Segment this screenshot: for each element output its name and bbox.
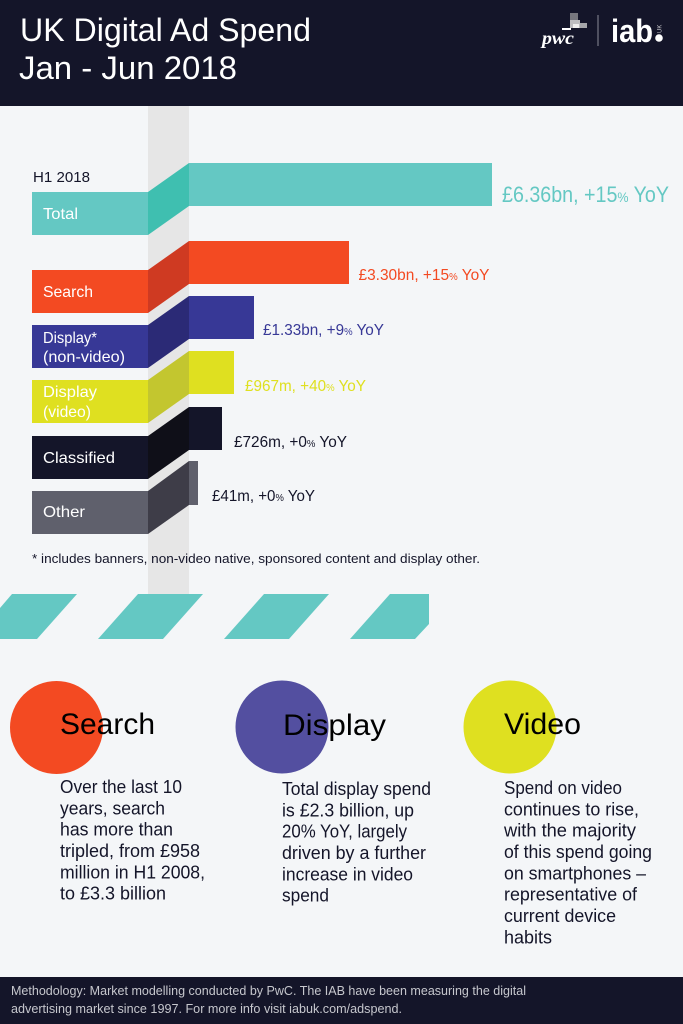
text: search: tripled, from £958	[60, 841, 200, 861]
footer: methodology: advertising market since 1997. For more info visit iabuk.com/adspend.	[11, 1001, 402, 1016]
bar: Classified: Classified	[43, 450, 115, 467]
panel: search	[10, 681, 205, 904]
H1 2018 label: H1 2018	[33, 169, 90, 186]
text: video: on smartphones –	[504, 863, 646, 883]
heading: search: Search	[60, 708, 155, 741]
text: video: Spend on video	[504, 778, 622, 798]
text: video: continues to rise,	[504, 799, 639, 819]
heading: video: Video	[504, 708, 581, 741]
logo: iab UK: UK	[658, 25, 664, 33]
logo: iab UK: iab	[611, 13, 653, 49]
header band	[0, 0, 683, 106]
bar: Other: Other	[43, 504, 86, 521]
circle: video	[464, 680, 556, 774]
bar: Other: £41m, +0% YoY	[212, 488, 315, 505]
bar: Display non-video: (non-video)	[43, 349, 125, 366]
title	[19, 12, 311, 86]
text: search: years, search	[60, 798, 165, 818]
text: search: million in H1 2008,	[60, 862, 205, 882]
teal stripe band	[0, 594, 429, 639]
text: video	[503, 778, 652, 947]
bar: Classified: £726m, +0% YoY	[234, 434, 347, 451]
logo: pwc	[540, 13, 587, 48]
footnote: * includes banners, non-video native, sponsored content and display other.	[32, 551, 480, 566]
bar: Search: £3.30bn, +15% YoY	[358, 267, 490, 284]
bar: Total: £6.36bn, +15% YoY	[502, 182, 669, 207]
text: search: has more than	[60, 820, 173, 840]
text: video: with the majority	[503, 821, 636, 841]
logo: pwc: pwc	[540, 28, 574, 48]
bar: Search	[32, 241, 490, 313]
text: display: 20% YoY, largely	[282, 822, 407, 842]
bar: Display non-video	[32, 296, 384, 368]
bar: Display video: (video)	[43, 404, 91, 421]
text: video: of this spend going	[504, 842, 652, 862]
text: display: is £2.3 billion, up	[282, 800, 414, 820]
footer: methodology	[0, 977, 683, 1024]
text: display: driven by a further	[282, 843, 426, 863]
text: search: Over the last 10	[60, 777, 182, 797]
text: search: to £3.3 billion	[60, 884, 166, 904]
text: search	[60, 777, 205, 904]
bar: Other	[32, 461, 315, 534]
text: display: increase in video	[282, 864, 413, 884]
bar: Display video: £967m, +40% YoY	[245, 378, 366, 395]
bar: Display non-video: Display*	[43, 330, 97, 347]
panel: display	[236, 680, 431, 906]
bar: Total: Total	[43, 206, 78, 223]
circle: search	[10, 681, 103, 774]
title: Jan - Jun 2018	[19, 50, 237, 86]
bar: Search: Search	[43, 284, 93, 301]
bar: Display video: Display	[43, 384, 97, 401]
bar: Display video	[32, 351, 366, 423]
footer: methodology: Methodology: Market modelling conducted by PwC. The IAB have been measuring the digital	[11, 983, 526, 998]
bar: Total	[32, 163, 669, 235]
title: UK Digital Ad Spend	[20, 12, 311, 48]
bar: Display non-video: £1.33bn, +9% YoY	[263, 322, 384, 339]
text: display: spend	[282, 886, 329, 906]
text: display: Total display spend	[282, 779, 431, 799]
circle: display	[236, 680, 328, 774]
bar: Classified	[32, 407, 347, 479]
text: video: habits	[504, 927, 552, 947]
text: video: representative of	[504, 885, 638, 905]
panel: video	[464, 680, 652, 947]
text: display	[282, 779, 431, 906]
heading: display: Display	[283, 709, 386, 742]
text: video: current device	[504, 906, 616, 926]
